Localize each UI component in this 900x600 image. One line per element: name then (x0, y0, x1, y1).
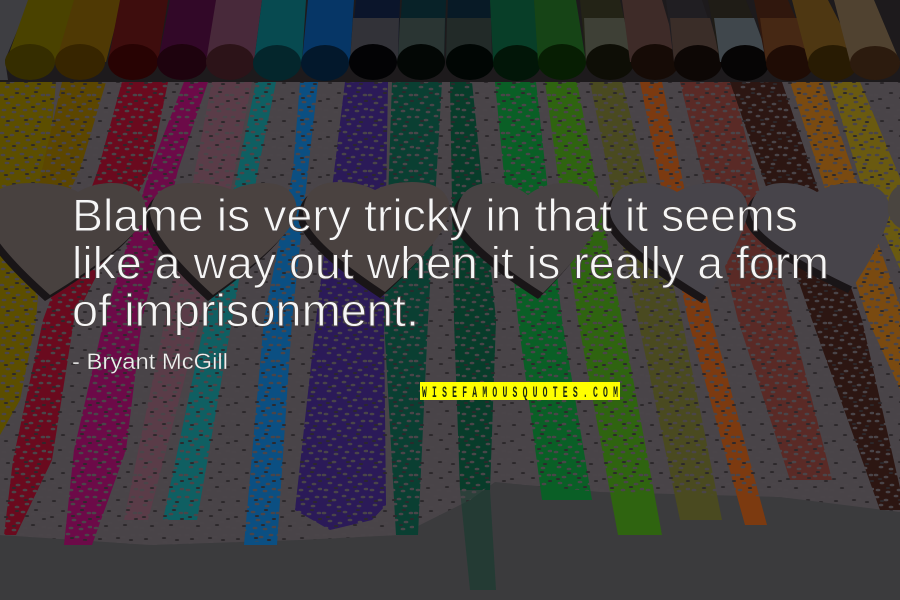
chalk: ochre (792, 0, 860, 81)
chalk: red (108, 0, 168, 80)
heart 7 at right edge (888, 185, 900, 228)
chalk: indigo (349, 0, 400, 80)
quote line 1: Blame is very tricky in that it seems (72, 190, 798, 241)
quote line 2: like a way out when it is really a form (72, 238, 829, 288)
chalk: orange-brown (754, 0, 814, 81)
chalk: blue (301, 0, 354, 81)
chalk: dark teal (397, 0, 446, 80)
heart 6 (750, 183, 890, 287)
source badge (420, 382, 620, 402)
chalk: lime (534, 0, 586, 80)
heart 2 (150, 183, 297, 295)
chalk: brown-orange (622, 0, 680, 80)
badge text: WISEFAMOUSQUOTES.COM (422, 384, 618, 402)
chalk: dark brown (708, 0, 770, 81)
attribution: - Bryant McGill (72, 349, 228, 374)
paper area (0, 82, 900, 545)
chalk: pink (206, 0, 262, 80)
chalk: green (490, 0, 541, 81)
chalk: deep green-grey (446, 0, 494, 80)
chalk: orange (55, 0, 122, 80)
quote text (72, 190, 829, 336)
row of wooden hearts (0, 182, 900, 303)
chalk backdrop (0, 0, 900, 82)
heart shadows (0, 188, 885, 303)
heart 3 (303, 182, 450, 292)
heart 4 (457, 183, 602, 293)
chalk: olive (580, 0, 634, 80)
chalk: tan (834, 0, 900, 80)
chalk: yellow (5, 0, 76, 80)
paper corner left (0, 0, 30, 80)
paper-grain speckle (0, 82, 900, 545)
badge background (420, 382, 620, 400)
heart 5 (610, 183, 748, 297)
row of chalk sticks (0, 0, 900, 82)
chalk: teal (253, 0, 306, 81)
quote line 3: of imprisonment. (72, 285, 419, 336)
chalk: brown (666, 0, 722, 81)
chalk: magenta (157, 0, 216, 80)
heart 1 (0, 183, 146, 295)
